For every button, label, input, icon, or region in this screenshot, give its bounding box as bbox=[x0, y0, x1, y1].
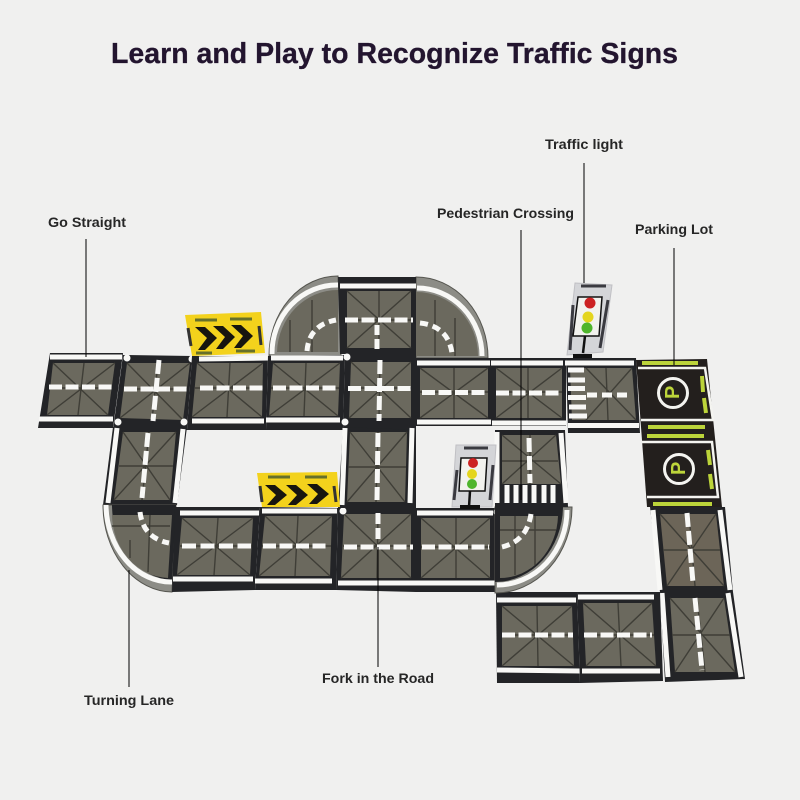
curve tile: upper right bbox=[416, 277, 488, 358]
icon: traffic light lower bbox=[452, 445, 496, 507]
label: Fork in the Road: Fork in the Road bbox=[322, 670, 434, 686]
tile: crossroad left bbox=[113, 354, 196, 430]
curve tile: turning lane bbox=[103, 505, 176, 592]
tile: lower straight 1 bbox=[172, 507, 260, 592]
tile: vertical right lower bbox=[660, 592, 745, 682]
icon: parking sign 1 bbox=[658, 378, 688, 408]
tile: straight bbox=[266, 355, 345, 430]
tile: central crossroad bbox=[342, 354, 416, 430]
tile: bottom straight 1 bbox=[496, 592, 580, 683]
curve tile: upper left bbox=[269, 276, 341, 356]
tile: zebra crossing horizontal bbox=[565, 358, 640, 433]
curve tile: lower right bbox=[495, 507, 572, 593]
tile: vertical with pedestrian crossing bbox=[495, 430, 568, 507]
label: Go Straight: Go Straight bbox=[48, 214, 126, 230]
label: Parking Lot: Parking Lot bbox=[635, 221, 713, 237]
label: Fork in the Road bbox=[322, 547, 434, 686]
tile: go straight bbox=[38, 353, 123, 428]
tile: vertical left bbox=[103, 427, 187, 512]
tile: vertical centre bbox=[338, 427, 416, 508]
road track assembly bbox=[38, 276, 745, 683]
icon: parking sign 1: P bbox=[662, 386, 684, 399]
tile: bottom straight 2 bbox=[577, 592, 663, 683]
tile: straight bbox=[416, 358, 491, 426]
label: Turning Lane bbox=[84, 570, 174, 708]
label: Pedestrian Crossing: Pedestrian Crossing bbox=[437, 205, 574, 221]
tile: lower straight 2 bbox=[255, 507, 338, 590]
label: Traffic light: Traffic light bbox=[545, 136, 623, 152]
label: Turning Lane: Turning Lane bbox=[84, 692, 174, 708]
icon: parking sign 2: P bbox=[668, 462, 690, 475]
tile: top centre T-junction bbox=[338, 277, 416, 354]
sign: yellow chevrons upper bbox=[185, 312, 265, 356]
icon: traffic light upper bbox=[567, 283, 612, 356]
tile: fork in the road bbox=[336, 508, 416, 592]
tile: straight bbox=[187, 356, 268, 430]
sign: yellow chevrons lower bbox=[257, 472, 340, 507]
tile: parking lots bbox=[636, 359, 722, 507]
icon: parking sign 2 bbox=[664, 454, 694, 484]
tile: straight bbox=[491, 358, 566, 426]
tile: lower straight 3 bbox=[416, 508, 500, 592]
tile: vertical right upper bbox=[650, 507, 733, 592]
title: Learn and Play to Recognize Traffic Signs bbox=[111, 38, 678, 70]
